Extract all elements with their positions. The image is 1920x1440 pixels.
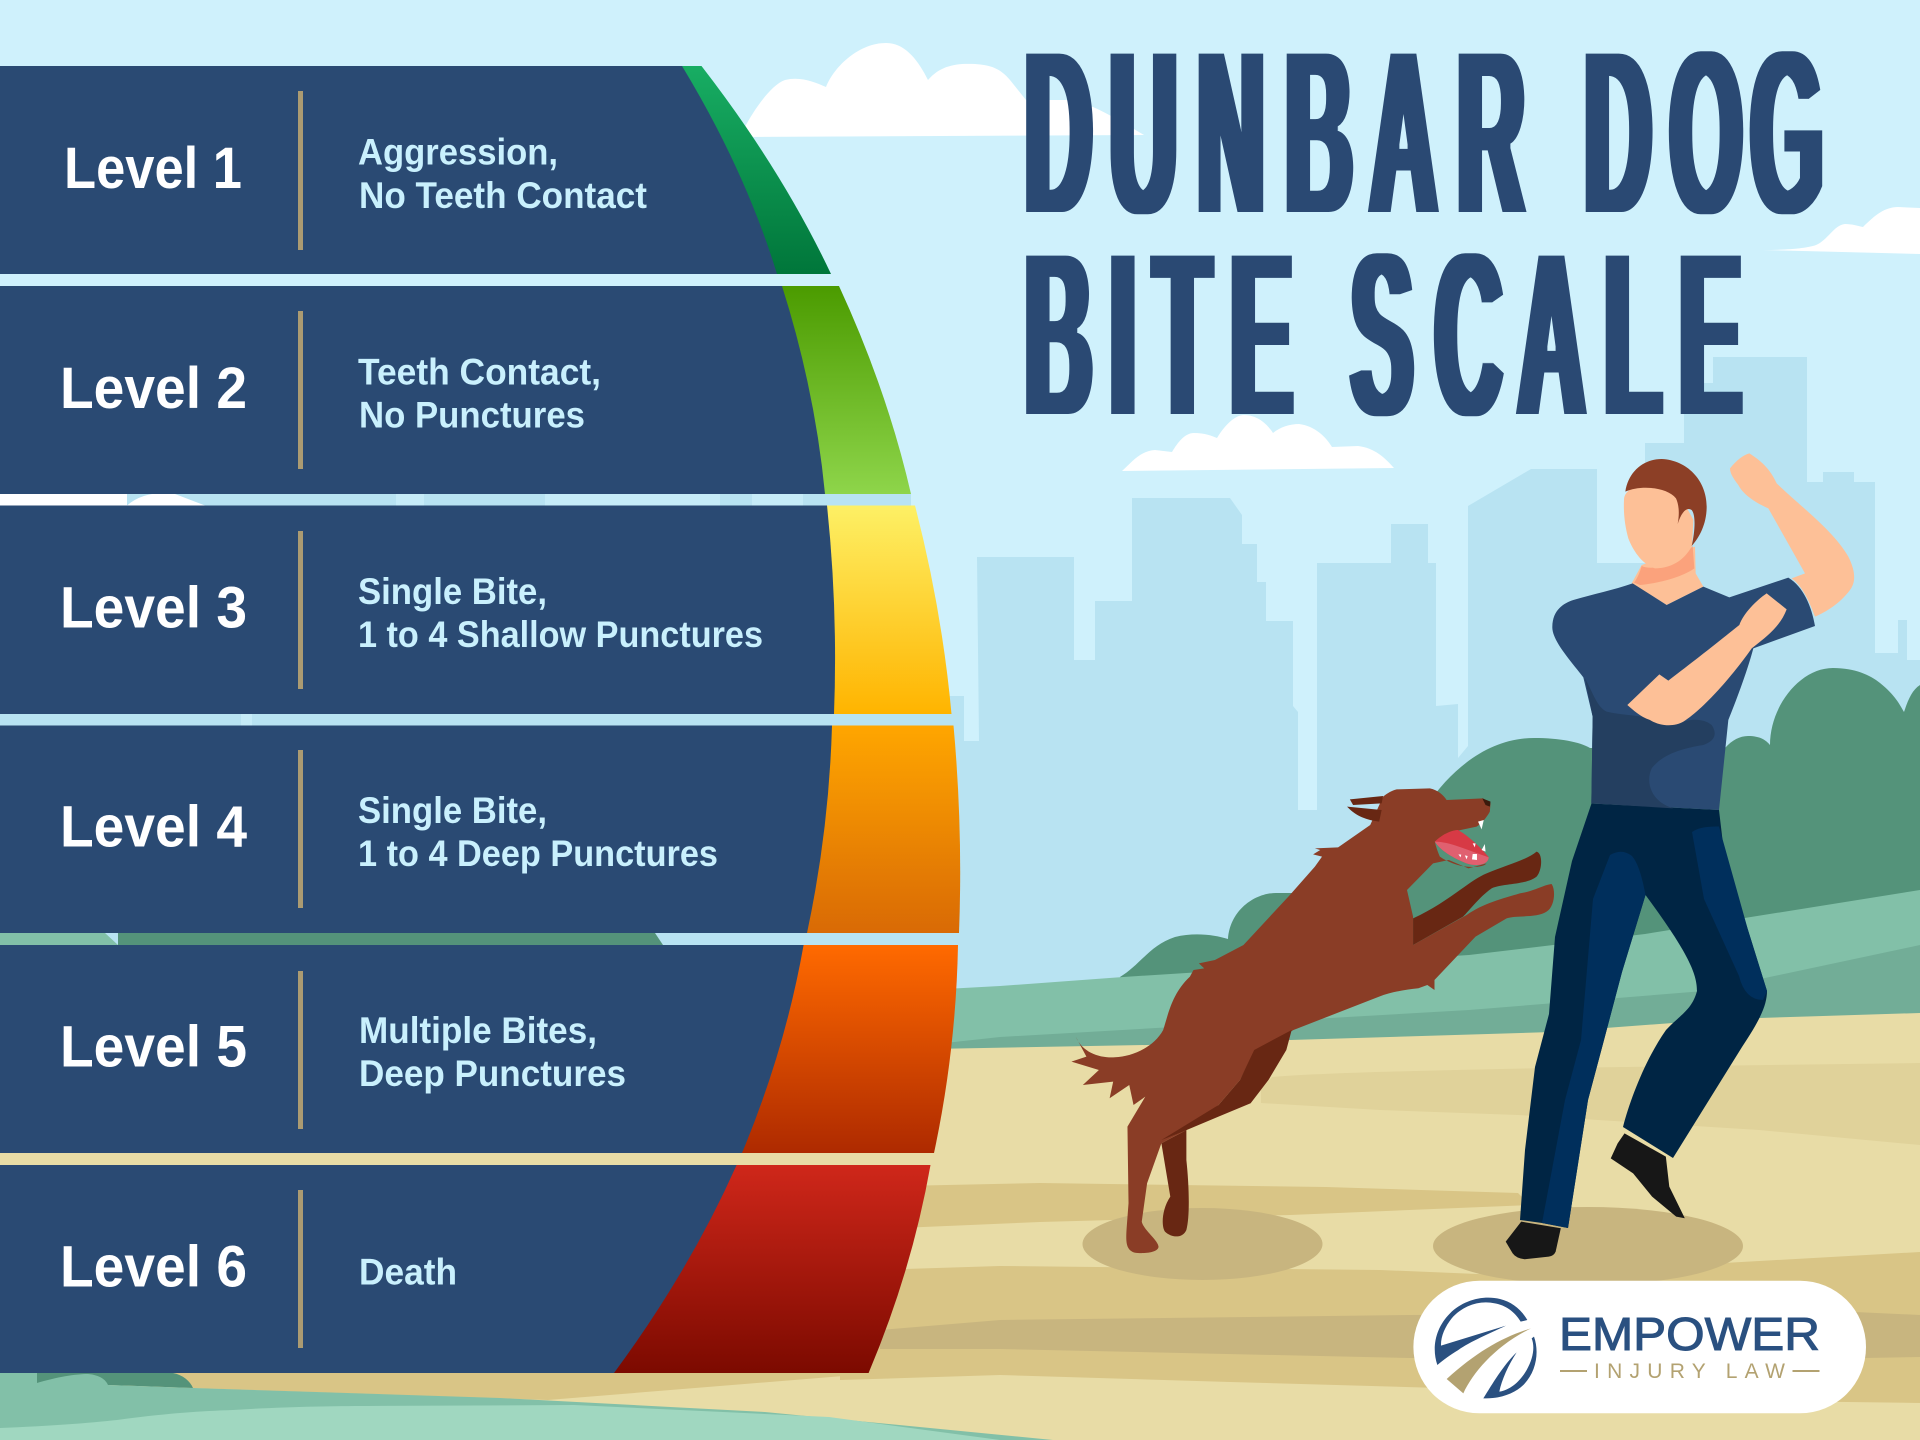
sand stripe darkest: [880, 1312, 1920, 1358]
man pants highlight left: [1542, 852, 1646, 1228]
logo subtitle rule left: [1560, 1370, 1587, 1372]
level 5 description: Deep Punctures: [359, 1053, 626, 1094]
cloud: top right: [1763, 207, 1920, 254]
man face: [1624, 485, 1693, 568]
man shirt: [1552, 578, 1815, 810]
man pants highlight right: [1692, 826, 1767, 1000]
level 3 label: Level 3: [60, 576, 247, 640]
man pants: [1520, 804, 1767, 1228]
level 4 label: Level 4: [60, 794, 247, 860]
level 6 divider: [298, 1190, 303, 1348]
city skyline: [0, 357, 1920, 1040]
level 1 description: No Teeth Contact: [359, 175, 647, 216]
panel: level 4: [0, 726, 960, 933]
level 2 description: Teeth Contact,: [358, 352, 601, 392]
level 1 description: [358, 132, 647, 216]
level 5 band: [0, 945, 804, 1153]
logo icon: [1435, 1298, 1537, 1398]
level 5 label: Level 5: [60, 1014, 247, 1080]
man left shoe: [1506, 1222, 1561, 1259]
left dark bush in gap: [118, 933, 663, 945]
level 1 band: [0, 66, 777, 274]
dog ear: [1347, 796, 1383, 822]
logo wordmark empower: EMPOWER: [1559, 1308, 1820, 1360]
panel: level 2: [0, 286, 911, 494]
sand ground: [0, 1013, 1920, 1440]
level 5 severity arc: [700, 945, 958, 1153]
shadow: dog: [1082, 1208, 1322, 1280]
left light hill in gap: [0, 933, 118, 945]
dog tongue: [1435, 842, 1489, 865]
man neck shadow: [1634, 546, 1694, 585]
man raised arm: [1730, 453, 1854, 617]
hill: light green: [945, 890, 1920, 1060]
level 2 label: Level 2: [60, 356, 247, 421]
man figure: [1506, 453, 1854, 1259]
level 3 band: [0, 506, 835, 714]
logo pill background: [1413, 1281, 1866, 1413]
dog belly shadow: [1161, 1030, 1292, 1140]
man shirt shadow: [1585, 678, 1715, 808]
dog nose: [1482, 798, 1491, 807]
cloud: under title: [1122, 415, 1394, 471]
level 6 band: [0, 1165, 737, 1373]
panel: level 6: [0, 1165, 930, 1373]
level 3 divider: [298, 531, 303, 689]
level 6 description: Death: [359, 1252, 457, 1292]
man hair: [1625, 459, 1707, 546]
level 4 description: 1 to 4 Deep Punctures: [358, 833, 718, 874]
level 1 description: Aggression,: [358, 132, 558, 172]
level 6 label: Level 6: [60, 1234, 247, 1300]
level 4 band: [0, 726, 832, 933]
title line 1: DUNBAR DOG: [1025, 1, 1823, 264]
level 1 divider: [298, 91, 303, 250]
level 2 divider: [298, 311, 303, 469]
man neck: [1632, 547, 1703, 605]
band gap lighter column: [241, 494, 803, 726]
sand stripe middle: [900, 1183, 1530, 1228]
bushes: [1120, 668, 1920, 1000]
level 5 divider: [298, 971, 303, 1129]
man front arm: [1627, 593, 1787, 725]
level 2 severity arc: [700, 286, 911, 494]
level 3 severity arc: [700, 506, 952, 714]
cloud strip behind band gap: [0, 493, 205, 506]
title: [1025, 1, 1823, 466]
hill: mid green: [945, 945, 1920, 1060]
level 4 description: [358, 790, 718, 874]
panel: level 5: [0, 945, 958, 1153]
foreground light hill: [0, 1405, 1000, 1440]
level 5 description: [359, 1010, 626, 1094]
logo ring bottom arc: [1483, 1337, 1537, 1398]
sand strip in band gap: [0, 1153, 940, 1165]
level 4 description: Single Bite,: [358, 790, 547, 831]
foreground hill: [0, 1373, 1053, 1440]
level 4 divider: [298, 750, 303, 908]
level 2 band: [0, 286, 825, 494]
level 2 description: No Punctures: [359, 394, 585, 436]
level 1 severity arc: [600, 66, 831, 274]
sand below band 6: [0, 1373, 880, 1400]
logo badge: [1413, 1281, 1866, 1413]
man right shoe: [1611, 1133, 1685, 1218]
sand stripe lower: [840, 1252, 1920, 1403]
logo subtitle: INJURY LAW: [1594, 1360, 1785, 1383]
level 5 description: Multiple Bites,: [359, 1010, 597, 1051]
panel: level 3: [0, 506, 952, 714]
logo ring top arc: [1435, 1298, 1527, 1365]
level 3 description: Single Bite,: [358, 571, 547, 612]
level 1 label: Level 1: [64, 136, 242, 201]
logo road swoosh: [1447, 1328, 1531, 1393]
sand stripe upper: [1261, 1063, 1920, 1145]
level 2 description: [358, 352, 601, 436]
dog mouth: [1435, 830, 1489, 865]
dog far front leg: [1413, 852, 1541, 945]
band gap skyline strip: [127, 494, 911, 506]
shadow: man: [1433, 1207, 1743, 1285]
dog far hind leg: [1161, 1130, 1189, 1236]
level 4 severity arc: [700, 726, 960, 933]
panel: level 1: [0, 66, 831, 274]
cloud: top centre: [740, 43, 1144, 137]
title line 2: BITE SCALE: [1025, 203, 1741, 466]
dog figure: [1071, 788, 1554, 1253]
dog body: [1071, 788, 1554, 1253]
logo subtitle rule right: [1792, 1370, 1820, 1372]
dog teeth: [1458, 820, 1486, 860]
level 3 description: [358, 571, 763, 655]
level 6 severity arc: [600, 1165, 930, 1373]
level 3 description: 1 to 4 Shallow Punctures: [358, 614, 763, 655]
foreground dark bush: [37, 1373, 193, 1388]
